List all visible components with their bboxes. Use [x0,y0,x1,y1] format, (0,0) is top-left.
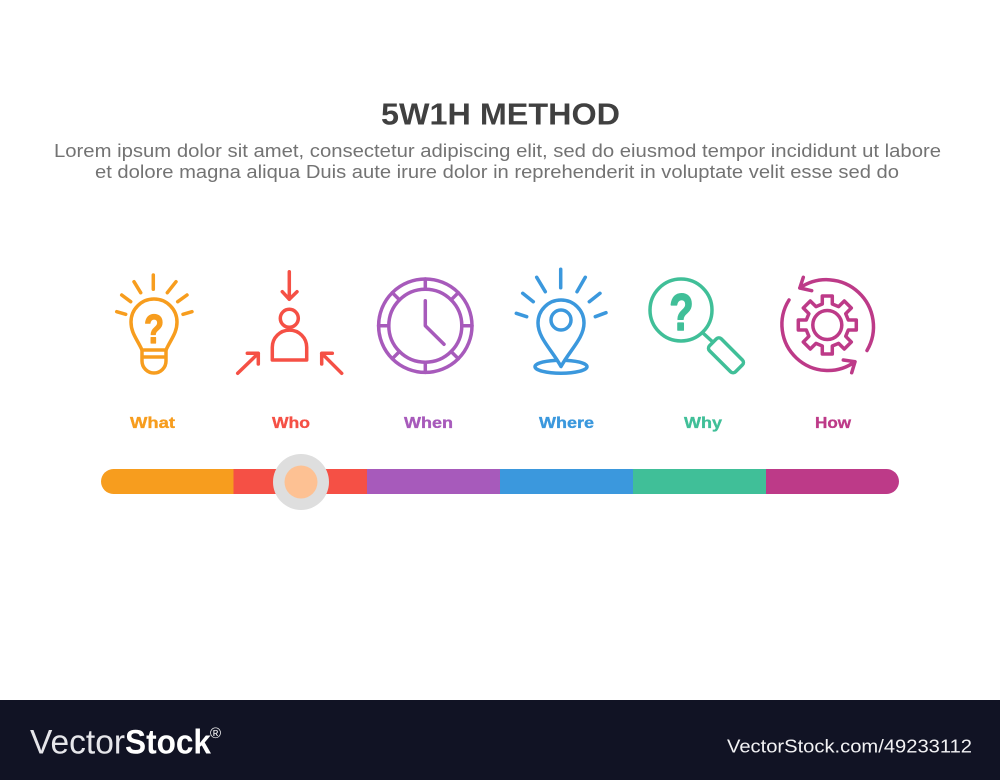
icon: magnifier with question mark (Why): ? [669,283,694,341]
icon: location pin (Where) [516,269,606,373]
icon: person with arrows (Who) [238,272,342,373]
subtitle text block: et dolore magna aliqua Duis aute irure dolor in reprehenderit in voluptate velit esse sed do [95,162,899,182]
subtitle text block: Lorem ipsum dolor sit amet, consectetur adipiscing elit, sed do eiusmod tempor incididunt ut labore [54,141,941,161]
title: 5W1H METHOD [381,96,620,132]
labels row: How [815,415,852,432]
labels row: Why [684,415,722,432]
footer logo: ® [210,725,221,742]
labels row [130,415,852,432]
subtitle text block [54,141,941,182]
icon: light bulb (What) [117,275,192,373]
icon: magnifier with question mark (Why) [650,279,745,374]
footer logo: Vector [30,724,125,762]
labels row: Who [272,415,310,432]
footer image id: VectorStock.com/49233112 [727,736,972,756]
labels row: Where [539,415,594,432]
footer logo: Stock [125,724,211,762]
footer band [0,700,1000,780]
icon: clock (When) [379,279,472,372]
labels row: When [404,415,453,432]
icon: light bulb (What): ? [144,305,164,352]
icon: gear with cycle arrows (How) [782,277,873,373]
slider marker [273,454,329,510]
labels row: What [130,415,176,432]
progress bar [101,469,899,494]
footer logo [30,724,221,762]
